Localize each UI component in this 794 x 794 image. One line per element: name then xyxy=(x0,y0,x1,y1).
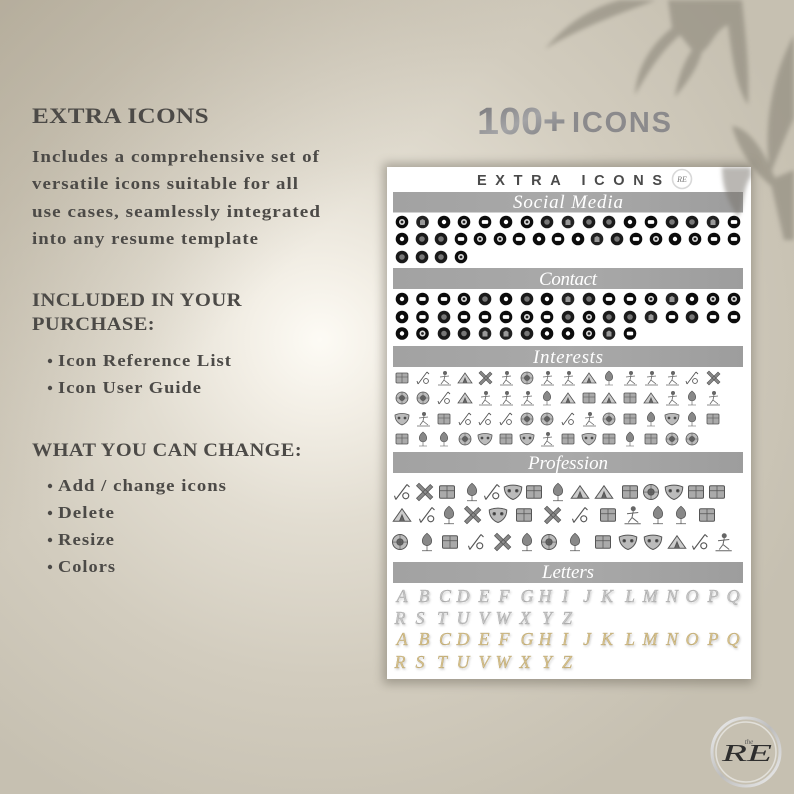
silver letters: K xyxy=(600,586,614,606)
sheet title: EXTRA ICONS xyxy=(477,173,662,189)
logo: RE seal xyxy=(712,718,780,786)
panel: icon sheet xyxy=(387,167,751,679)
section bar: profession xyxy=(393,452,743,474)
silver letters: A xyxy=(396,586,408,606)
list: included: Icon User Guide xyxy=(58,378,202,397)
gold letters: H xyxy=(538,629,552,649)
gold letters: Z xyxy=(562,652,573,672)
logo: RE seal: the xyxy=(745,738,753,746)
leaf shadows xyxy=(545,0,794,240)
heading: what you can change: WHAT YOU CAN CHANGE: xyxy=(32,440,302,461)
heading: included in your purchase xyxy=(32,290,242,335)
description: use cases, seamlessly integrated xyxy=(32,202,321,221)
gold letters: Q xyxy=(726,629,740,649)
silver letters: I xyxy=(561,586,569,606)
gold letters: N xyxy=(665,629,679,649)
gold letters: X xyxy=(518,652,532,672)
section bar: letters: Letters xyxy=(541,562,594,583)
gold letters: I xyxy=(561,629,569,649)
gold letters: P xyxy=(706,629,718,649)
silver letters: W xyxy=(496,608,512,628)
leaf shadow over page corner xyxy=(722,167,751,217)
heading: included in your purchase: PURCHASE: xyxy=(32,314,155,335)
gold letters: A xyxy=(396,629,408,649)
silver letters: B xyxy=(418,586,430,606)
sheet logo xyxy=(672,170,692,188)
gold letters: T xyxy=(437,652,449,672)
list: changes: Delete xyxy=(58,503,115,522)
silver letters: X xyxy=(518,608,532,628)
contact icons xyxy=(396,293,740,340)
description xyxy=(32,147,321,248)
gold letters: Y xyxy=(542,652,554,672)
heading: extra icons: EXTRA ICONS xyxy=(32,103,209,128)
description: versatile icons suitable for all xyxy=(32,174,299,193)
section bar: social media: Social Media xyxy=(513,192,623,213)
gold letters: K xyxy=(600,629,614,649)
gold letters: G xyxy=(520,629,534,649)
section bar: social media xyxy=(393,192,743,213)
list: included xyxy=(48,351,232,397)
silver letters: Z xyxy=(562,608,573,628)
section bar: interests: Interests xyxy=(532,347,603,368)
social media icons xyxy=(396,216,740,263)
list: included: Icon Reference List xyxy=(58,351,232,370)
list: changes: Colors xyxy=(58,557,116,576)
description: into any resume template xyxy=(32,229,259,248)
silver letters: N xyxy=(665,586,679,606)
silver letters: G xyxy=(520,586,534,606)
silver letters: Q xyxy=(726,586,740,606)
gold letters: S xyxy=(416,652,424,672)
section bar: contact: Contact xyxy=(539,269,598,290)
gold letters: V xyxy=(478,652,492,672)
gold letters: W xyxy=(496,652,512,672)
logo: RE seal: RE xyxy=(720,741,773,767)
section bar: letters xyxy=(393,562,743,583)
profession icons xyxy=(392,483,732,551)
silver letters: S xyxy=(416,608,424,628)
gold letters xyxy=(394,629,740,672)
heading: 100+ icons xyxy=(477,101,671,143)
silver letters: P xyxy=(706,586,718,606)
gold letters: B xyxy=(418,629,430,649)
gold letters: M xyxy=(642,629,658,649)
sheet logo: RE xyxy=(676,175,687,184)
section bar: profession: Profession xyxy=(527,453,608,474)
silver letters xyxy=(394,586,740,628)
silver letters: U xyxy=(456,608,470,628)
silver letters: Y xyxy=(542,608,554,628)
heading: 100+ icons: 100+ xyxy=(477,101,566,143)
silver letters: D xyxy=(456,586,470,606)
gold letters: J xyxy=(583,629,592,649)
silver letters: F xyxy=(498,586,510,606)
silver letters: R xyxy=(394,608,406,628)
silver letters: O xyxy=(686,586,698,606)
silver letters: C xyxy=(439,586,452,606)
silver letters: E xyxy=(478,586,490,606)
interests icons xyxy=(395,371,720,446)
silver letters: J xyxy=(583,586,592,606)
heading: 100+ icons: ICONS xyxy=(572,107,671,139)
silver letters: M xyxy=(642,586,658,606)
section bar: contact xyxy=(393,268,743,290)
silver letters: V xyxy=(478,608,492,628)
gold letters: D xyxy=(456,629,470,649)
silver letters: L xyxy=(624,586,635,606)
description: Includes a comprehensive set of xyxy=(32,147,320,166)
list: changes xyxy=(48,476,227,576)
gold letters: F xyxy=(498,629,510,649)
heading: included in your purchase: INCLUDED IN YOUR xyxy=(32,290,242,311)
section bar: interests xyxy=(393,346,743,368)
gold letters: O xyxy=(686,629,698,649)
gold letters: U xyxy=(456,652,470,672)
page shadow xyxy=(383,163,753,684)
gold letters: L xyxy=(624,629,635,649)
gold letters: C xyxy=(439,629,452,649)
silver letters: H xyxy=(538,586,552,606)
list: changes: Add / change icons xyxy=(58,476,227,495)
list: changes: Resize xyxy=(58,530,115,549)
silver letters: T xyxy=(437,608,449,628)
gold letters: E xyxy=(478,629,490,649)
gold letters: R xyxy=(394,652,406,672)
